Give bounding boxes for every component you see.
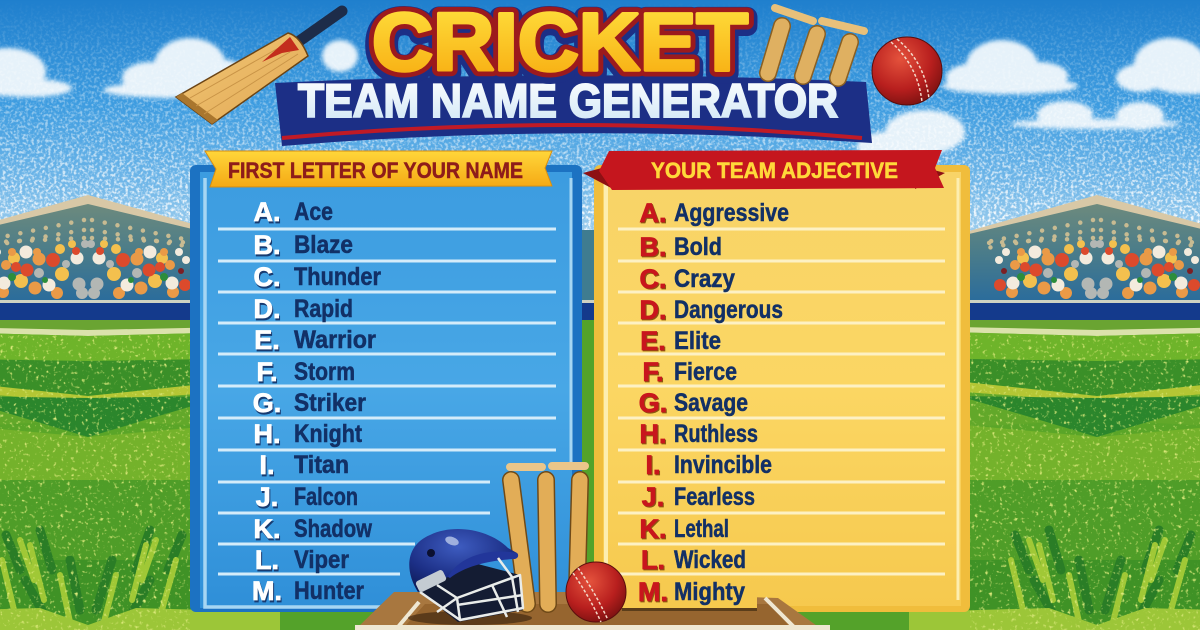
row M: yellow panel: Mighty [674,578,745,606]
letters column A to M: blue panel: B. [254,230,280,260]
names column: blue panel [294,198,381,605]
adjectives column A to L: yellow panel: Elite [674,327,721,355]
letters column A to L: yellow panel: L. [641,545,665,575]
letters column A to L: yellow panel: I. [645,450,661,480]
ribbon heading: your team adjective [583,150,945,190]
letters column A to M: blue panel: M. [252,576,282,606]
ruled lines: yellow panel [618,229,945,574]
letters column A to M: blue panel: D. [254,294,280,324]
names column: blue panel: Storm [294,358,355,386]
letters column A to M: blue panel: C. [254,262,280,292]
adjectives column A to L: yellow panel: Crazy [674,265,735,293]
adjectives column A to L: yellow panel: Bold [674,233,722,261]
row M: yellow panel [622,577,757,611]
letters column A to L: yellow panel: C. [640,264,666,294]
icon: flying stumps and bails [768,8,864,78]
letters column A to L: yellow panel: A. [640,198,666,228]
letters column A to L: yellow panel: J. [642,482,664,512]
letters column A to M: blue panel: F. [256,357,278,387]
letters column A to M: blue panel: G. [253,388,281,418]
adjectives column A to L: yellow panel: Aggressive [674,199,789,227]
centre strip behind panels [280,230,920,630]
letters column A to L: yellow panel: E. [640,326,666,356]
names column: blue panel: Blaze [294,231,353,259]
letters column A to M: blue panel: H. [254,419,280,449]
letters column A to M: blue panel: J. [256,482,278,512]
clouds [0,38,1200,160]
names column: blue panel: Viper [294,546,349,574]
letters column A to M: blue panel: K. [254,514,280,544]
subtitle banner: team name generator: TEAM NAME GENERATOR [298,74,838,127]
letters column A to L: yellow panel: K. [640,514,666,544]
icon: cricket bat top left [176,11,342,124]
letters column A to L: yellow panel: B. [640,232,666,262]
letters column A to L: yellow panel: H. [640,419,666,449]
adjectives column A to L: yellow panel: Lethal [674,515,729,543]
adjectives column A to L: yellow panel: Wicked [674,546,746,574]
letters column A to M: blue panel [252,197,282,606]
names column: blue panel: Titan [294,451,349,479]
names column: blue panel: Rapid [294,295,353,323]
names column: blue panel: Hunter [294,577,364,605]
letters column A to M: blue panel: L. [255,545,279,575]
yellow panel overlap on pitch [612,590,757,608]
ribbon heading: first letter of your name [205,151,552,187]
icon: wicket stumps and bails [510,466,585,604]
letters column A to L: yellow panel: D. [640,295,666,325]
names column: blue panel: Shadow [294,515,372,543]
ribbon heading: your team adjective: YOUR TEAM ADJECTIVE [651,158,898,183]
adjectives column A to L: yellow panel: Fierce [674,358,737,386]
adjectives column A to L: yellow panel [674,199,789,574]
names column: blue panel: Knight [294,420,363,448]
letters column A to M: blue panel: A. [254,197,280,227]
adjectives column A to L: yellow panel: Invincible [674,451,772,479]
pitch at bottom centre [355,592,830,630]
letters column A to L: yellow panel [639,198,667,575]
names column: blue panel: Falcon [294,483,358,511]
row M: yellow panel: M. [638,577,668,607]
letters column A to M: blue panel: E. [254,325,280,355]
icon: red cricket ball top right [872,37,942,105]
panel: team adjective (yellow) [594,165,970,612]
title: cricket: CRICKET [372,0,748,91]
names column: blue panel: Thunder [294,263,381,291]
ruled lines: blue panel [218,229,556,574]
icon: red cricket ball bottom [566,562,626,622]
adjectives column A to L: yellow panel: Ruthless [674,420,758,448]
names column: blue panel: Warrior [294,326,376,354]
adjectives column A to L: yellow panel: Savage [674,389,748,417]
adjectives column A to L: yellow panel: Fearless [674,483,755,511]
letters column A to L: yellow panel: F. [642,357,664,387]
names column: blue panel: Striker [294,389,366,417]
letters column A to M: blue panel: I. [259,450,275,480]
subtitle banner: team name generator [275,74,872,146]
adjectives column A to L: yellow panel: Dangerous [674,296,783,324]
icon: blue cricket helmet with grille [408,529,532,625]
names column: blue panel: Ace [294,198,333,226]
ribbon heading: first letter of your name: FIRST LETTER OF YOUR NAME [228,158,523,183]
panel: first letter (blue) [190,165,582,612]
letters column A to L: yellow panel: G. [639,388,667,418]
